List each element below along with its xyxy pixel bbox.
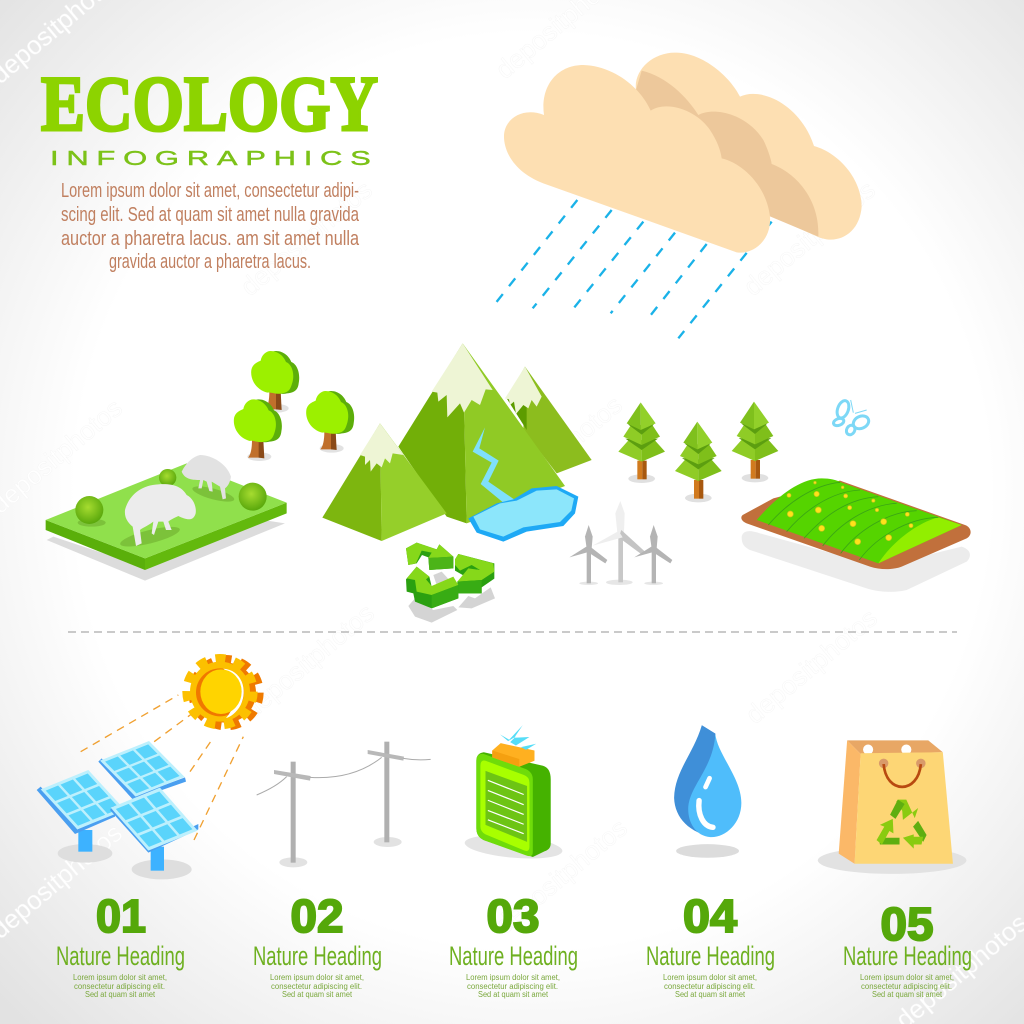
wind turbines <box>569 501 672 585</box>
body 02: Lorem ipsum dolor sit amet, <box>270 973 364 982</box>
bushes <box>75 469 267 527</box>
body 01: Sed at quam sit amet <box>85 990 156 999</box>
platform <box>46 463 287 570</box>
watermarks: depositphotos <box>235 175 378 302</box>
round tree 2 <box>234 399 282 461</box>
heading 03: Nature Heading <box>449 941 578 971</box>
butterfly <box>833 399 871 436</box>
sun rays <box>81 695 243 840</box>
arrow top <box>406 543 453 570</box>
pine tree 3 <box>732 402 778 482</box>
body 03: Sed at quam sit amet <box>478 990 549 999</box>
body 04: Lorem ipsum dolor sit amet, <box>663 973 757 982</box>
intro text block: auctor a pharetra lacus. am sit amet nulla <box>61 228 360 250</box>
subtitle: INFOGRAPHICS <box>50 147 371 170</box>
pine trees, butterfly and field <box>618 399 971 592</box>
field hill <box>757 478 962 563</box>
body 05: Lorem ipsum dolor sit amet, <box>860 973 954 982</box>
back cloud <box>636 53 862 240</box>
intro text block: gravida auctor a pharetra lacus. <box>109 251 311 273</box>
body 02 <box>270 973 364 999</box>
cloud side shading <box>636 71 818 237</box>
large sheep <box>119 484 196 551</box>
water drop <box>674 725 741 858</box>
round tree 1 <box>251 351 299 413</box>
intro text block: scing elit. Sed at quam sit amet nulla gravida <box>61 204 360 226</box>
column 04 <box>646 890 775 999</box>
number 03: 03 <box>486 890 540 942</box>
arrow bottom <box>406 567 458 608</box>
body 01 <box>73 973 167 999</box>
intro text block <box>61 180 360 273</box>
heading 04: Nature Heading <box>646 941 775 971</box>
ground shadow <box>47 520 285 581</box>
rain <box>493 200 772 338</box>
field end <box>878 517 962 563</box>
field base <box>741 481 971 569</box>
rain cloud <box>493 53 862 338</box>
arrow right <box>455 554 494 593</box>
river <box>473 427 515 504</box>
number 02: 02 <box>290 890 344 942</box>
main mountain <box>398 343 565 523</box>
small sheep <box>182 455 236 505</box>
mountains and lake <box>322 343 672 585</box>
body 02: Sed at quam sit amet <box>282 990 353 999</box>
body 05: Sed at quam sit amet <box>872 990 943 999</box>
lake <box>468 486 578 542</box>
watermarks: depositphotos <box>738 175 881 302</box>
body 05: consectetur adipiscing elit. <box>861 982 952 991</box>
column 03 <box>449 890 578 999</box>
field shadow <box>742 531 970 592</box>
column 05 <box>843 898 972 999</box>
arrows shadow <box>408 572 495 623</box>
solar and power icons <box>37 658 431 879</box>
number 05: 05 <box>880 898 934 950</box>
column 01 <box>56 890 185 999</box>
pine tree 1 <box>618 402 665 483</box>
front cloud <box>504 65 770 253</box>
body 05 <box>860 973 954 999</box>
bag recycle symbol <box>877 800 927 849</box>
flowers <box>787 481 913 545</box>
sun <box>187 658 259 726</box>
pine tree 2 <box>675 422 722 502</box>
intro text block: Lorem ipsum dolor sit amet, consectetur adipi- <box>61 180 359 202</box>
body 03 <box>466 973 560 999</box>
body 04: Sed at quam sit amet <box>675 990 746 999</box>
heading 02: Nature Heading <box>253 941 382 971</box>
utility poles <box>257 742 431 867</box>
battery, drop, bag icons <box>464 725 966 874</box>
number 04: 04 <box>683 890 737 942</box>
body 01: consectetur adipiscing elit. <box>74 982 165 991</box>
body 04: consectetur adipiscing elit. <box>664 982 755 991</box>
body 03: Lorem ipsum dolor sit amet, <box>466 973 560 982</box>
watermarks: depositphotos <box>490 813 633 940</box>
body 01: Lorem ipsum dolor sit amet, <box>73 973 167 982</box>
heading 01: Nature Heading <box>56 941 185 971</box>
round tree 3 <box>306 391 354 453</box>
body 02: consectetur adipiscing elit. <box>271 982 362 991</box>
watermarks: depositphotos <box>237 598 380 725</box>
furrows <box>768 482 938 560</box>
solar panels <box>37 741 198 879</box>
back mountain <box>505 367 592 473</box>
recycle arrows <box>406 543 495 623</box>
body 04 <box>663 973 757 999</box>
body 03: consectetur adipiscing elit. <box>467 982 558 991</box>
watermarks: depositphotos <box>740 603 883 730</box>
divider <box>68 631 957 633</box>
column 02 <box>253 890 382 999</box>
watermarks: depositphotos <box>485 390 628 517</box>
small mountain <box>322 423 447 541</box>
battery <box>464 725 563 862</box>
meadow with sheep <box>46 351 354 581</box>
number 01: 01 <box>96 890 146 942</box>
title: ECOLOGY <box>41 60 378 147</box>
recycle bag <box>818 740 966 874</box>
